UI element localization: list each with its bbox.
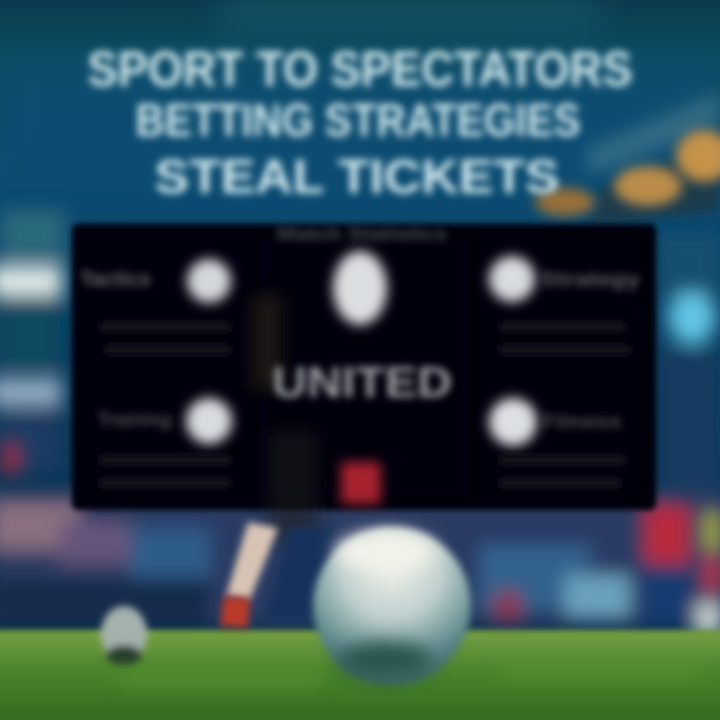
football in foreground [313, 527, 471, 685]
player in background [220, 430, 381, 628]
right column item 1 [489, 256, 641, 355]
left column item 1 [80, 259, 231, 355]
panel: dark information board [72, 224, 656, 510]
title: STEAL TICKETS [154, 151, 560, 204]
crowd [0, 490, 720, 637]
right stands [660, 235, 720, 500]
title [88, 41, 632, 204]
left stands [0, 210, 65, 475]
left column item 2 [98, 398, 232, 488]
left column item 1: Tactics [80, 268, 151, 291]
small distant ball [101, 606, 147, 665]
right column item 1: Strategy [540, 269, 641, 291]
left column item 2: Training [98, 410, 172, 431]
centre label: UNITED [272, 358, 452, 407]
centre icon: shield [333, 251, 387, 325]
right column item 2 [489, 398, 625, 488]
panel heading: Match Statistics [277, 224, 447, 244]
right column item 2: Fitness [542, 412, 622, 433]
stadium roof and floodlights [535, 92, 720, 225]
title: BETTING STRATEGIES [136, 94, 580, 146]
title: SPORT TO SPECTATORS [88, 41, 632, 97]
grass pitch [0, 630, 720, 720]
